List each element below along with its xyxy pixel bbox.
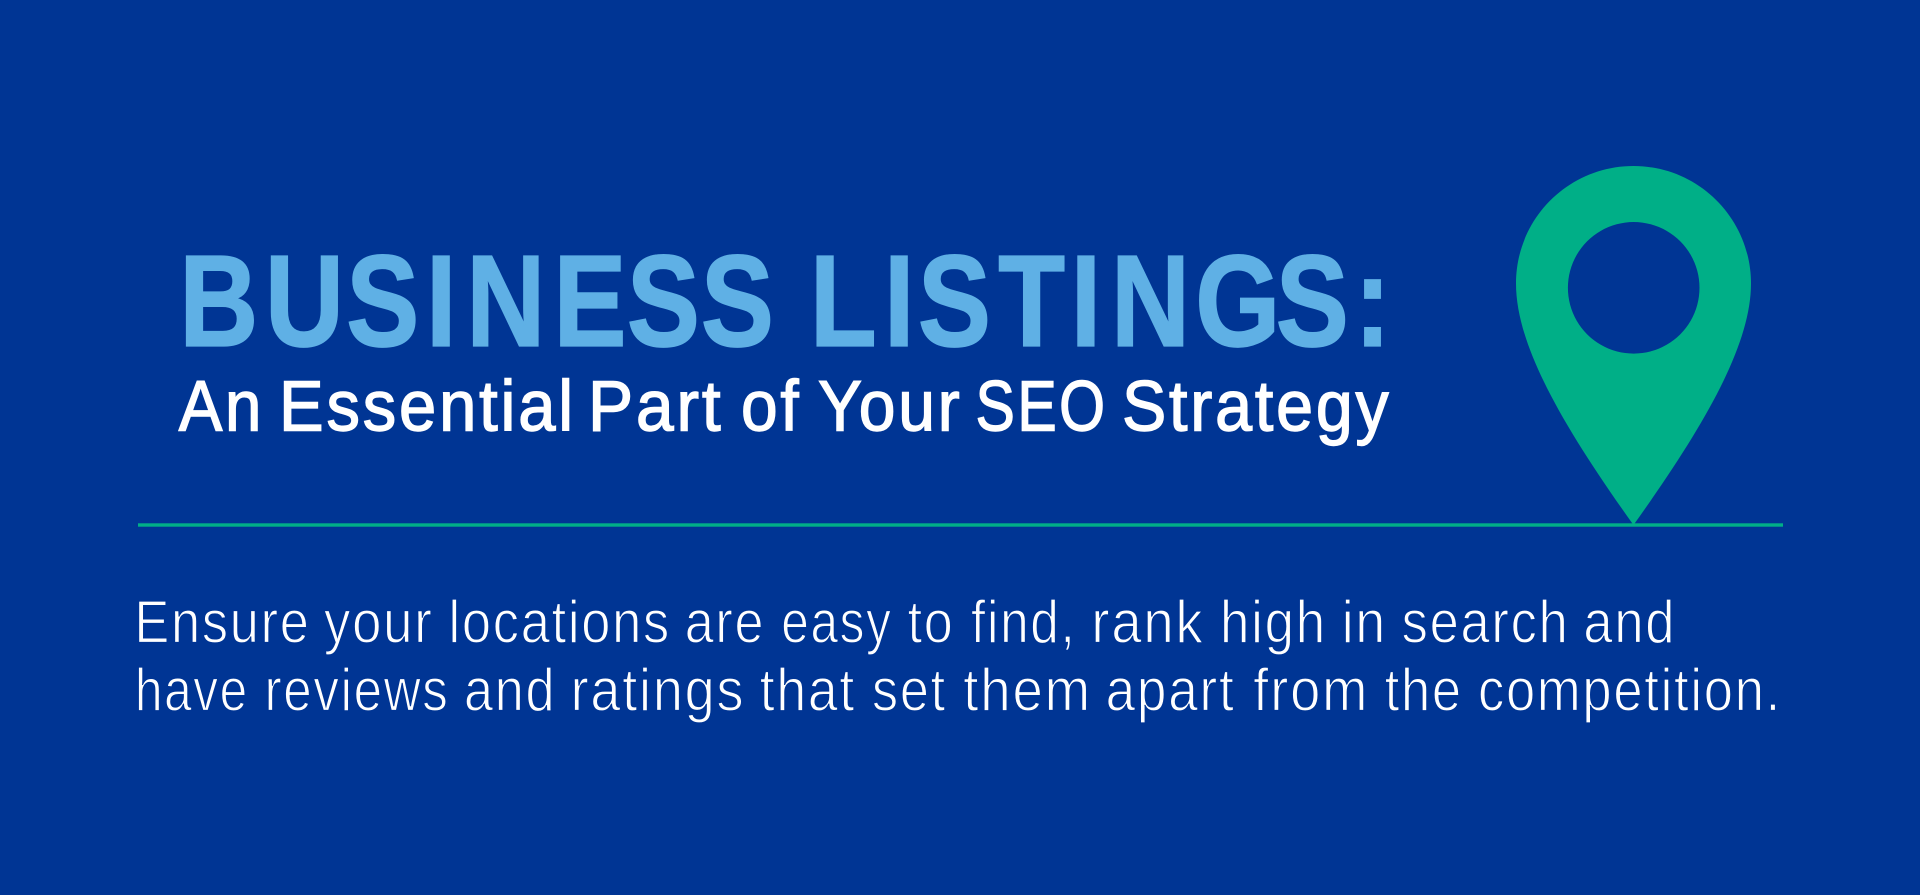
description line 2: that — [760, 657, 856, 724]
description line 1: and — [1583, 589, 1676, 656]
subtitle: SEO — [976, 368, 1108, 446]
description line 1: locations — [448, 589, 671, 656]
subtitle — [179, 368, 1392, 446]
subtitle: Part — [588, 368, 724, 446]
description line 1: high — [1220, 589, 1327, 656]
description line 1: in — [1342, 589, 1387, 656]
subtitle: Essential — [279, 368, 576, 446]
description line 2: and — [464, 657, 556, 724]
subtitle: of — [741, 368, 802, 446]
description text — [134, 589, 1782, 724]
description line 1: are — [685, 589, 765, 656]
subtitle: Your — [818, 368, 962, 446]
description line 2: competition. — [1478, 657, 1782, 724]
description line 2 — [135, 657, 1782, 724]
description line 2: ratings — [571, 657, 745, 724]
title: business listings: BUSINESS LISTINGS: — [179, 229, 1391, 374]
description line 1: Ensure — [134, 589, 311, 656]
description line 2: set — [872, 657, 947, 724]
ground line — [138, 523, 1783, 527]
subtitle: An — [179, 368, 264, 446]
description line 1: rank — [1091, 589, 1204, 656]
description line 1: to — [908, 589, 954, 656]
description line 2: from — [1253, 657, 1369, 724]
description line 1: search — [1402, 589, 1570, 656]
description line 2: reviews — [265, 657, 450, 724]
description line 1: easy — [781, 589, 892, 656]
subtitle: Strategy — [1122, 368, 1392, 446]
description line 1: your — [324, 589, 434, 656]
description line 1: find, — [971, 589, 1076, 656]
description line 2: apart — [1106, 657, 1236, 724]
icon: location pin — [1516, 166, 1751, 525]
description line 2: them — [963, 657, 1092, 724]
description line 2: the — [1385, 657, 1463, 724]
description line 1 — [134, 589, 1676, 656]
description line 2: have — [135, 657, 249, 724]
